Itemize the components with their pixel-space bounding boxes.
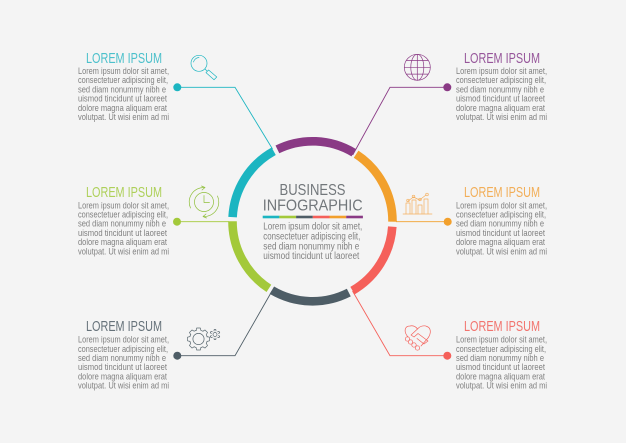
title: BUSINESS — [280, 182, 346, 199]
text block: purple: dolore magna aliquam erat — [456, 102, 545, 113]
text block: dark: uismod tincidunt ut laoreet — [78, 361, 167, 372]
connector: purple — [353, 83, 451, 155]
panel: middle left green — [78, 185, 229, 256]
center text block: Lorem ipsum dolor sit amet, — [263, 222, 362, 232]
connector: teal — [173, 83, 272, 149]
text block: green — [78, 199, 169, 256]
text block: orange: dolore magna aliquam erat — [456, 236, 545, 247]
text block: orange — [456, 199, 547, 256]
text block: teal — [78, 65, 169, 122]
icon: globe — [404, 54, 430, 80]
heading: red: LOREM IPSUM — [464, 319, 540, 335]
icon: handshake heart — [405, 326, 430, 350]
text block: orange: sed diam nonummy nibh e — [456, 218, 544, 229]
text block: orange: Lorem ipsum dolor sit amet, — [456, 199, 547, 210]
text block: dark: Lorem ipsum dolor sit amet, — [78, 334, 169, 345]
heading: teal: LOREM IPSUM — [86, 51, 162, 67]
text block: teal: Lorem ipsum dolor sit amet, — [78, 65, 169, 76]
text block: dark: dolore magna aliquam erat — [78, 370, 167, 381]
title: INFOGRAPHIC — [263, 198, 363, 215]
text block: green: consectetuer adipiscing elit, — [78, 208, 168, 220]
text block: green: dolore magna aliquam erat — [78, 236, 167, 247]
heading: dark: LOREM IPSUM — [86, 319, 162, 335]
arc: orange — [356, 154, 393, 222]
text block: teal: volutpat. Ut wisi enim ad mi — [78, 111, 169, 122]
arc: green — [232, 221, 269, 288]
heading: purple: LOREM IPSUM — [464, 51, 540, 67]
panel: bottom left dark — [78, 291, 272, 391]
text block: green: uismod tincidunt ut laoreet — [78, 227, 167, 238]
heading: orange: LOREM IPSUM — [464, 185, 540, 201]
icon: bar chart — [403, 193, 432, 214]
icon: clock with arrows — [189, 186, 219, 218]
text block: purple: uismod tincidunt ut laoreet — [456, 93, 545, 104]
text block: purple: Lorem ipsum dolor sit amet, — [456, 65, 547, 76]
text block: red: consectetuer adipiscing elit, — [456, 343, 546, 354]
center block — [263, 182, 363, 262]
connector: orange — [396, 218, 452, 226]
text block: green: sed diam nonummy nibh e — [78, 218, 166, 229]
text block: teal: uismod tincidunt ut laoreet — [78, 93, 167, 104]
text block: green: volutpat. Ut wisi enim ad mi — [78, 245, 169, 256]
panel: top right purple — [353, 51, 547, 155]
text block: dark: consectetuer adipiscing elit, — [78, 343, 168, 354]
text block: dark: volutpat. Ut wisi enim ad mi — [78, 380, 169, 391]
connector: red — [352, 291, 451, 360]
text block: orange: volutpat. Ut wisi enim ad mi — [456, 245, 547, 256]
text block: red — [456, 334, 547, 391]
text block: orange: uismod tincidunt ut laoreet — [456, 227, 545, 238]
center text block: consectetuer adipiscing elit, — [263, 231, 360, 242]
connector: green — [173, 218, 229, 226]
arc: purple — [277, 141, 354, 153]
text block: dark: sed diam nonummy nibh e — [78, 352, 166, 363]
center text block: uismod tincidunt ut laoreet — [263, 251, 359, 262]
ring chart: six coloured arcs — [232, 141, 393, 301]
text block: purple — [456, 65, 547, 122]
text block: red: sed diam nonummy nibh e — [456, 352, 544, 363]
arc: teal — [233, 151, 274, 217]
arc: dark — [272, 290, 349, 301]
text block: red: dolore magna aliquam erat — [456, 370, 545, 381]
arc: red — [352, 227, 392, 291]
icon: magnifier — [191, 55, 217, 80]
text block: red: volutpat. Ut wisi enim ad mi — [456, 380, 547, 391]
text block: purple: consectetuer adipiscing elit, — [456, 74, 546, 85]
text block: dark — [78, 334, 169, 391]
connector: dark — [173, 291, 272, 360]
text block: orange: consectetuer adipiscing elit, — [456, 208, 546, 220]
center text block — [263, 222, 362, 262]
panel: bottom right red — [352, 291, 547, 391]
text block: teal: consectetuer adipiscing elit, — [78, 74, 168, 85]
text block: purple: sed diam nonummy nibh e — [456, 83, 544, 94]
title — [263, 182, 363, 215]
text block: teal: dolore magna aliquam erat — [78, 102, 167, 113]
text block: purple: volutpat. Ut wisi enim ad mi — [456, 111, 547, 122]
colour bar — [263, 216, 363, 218]
panel: middle right orange — [396, 185, 547, 256]
heading: green: LOREM IPSUM — [86, 185, 162, 201]
text block: green: Lorem ipsum dolor sit amet, — [78, 199, 169, 210]
text block: red: uismod tincidunt ut laoreet — [456, 361, 545, 372]
panel: top left teal — [78, 51, 272, 149]
text block: teal: sed diam nonummy nibh e — [78, 83, 166, 94]
text block: red: Lorem ipsum dolor sit amet, — [456, 334, 547, 345]
icon: gears — [188, 328, 220, 350]
center text block: sed diam nonummy nibh e — [263, 241, 360, 252]
